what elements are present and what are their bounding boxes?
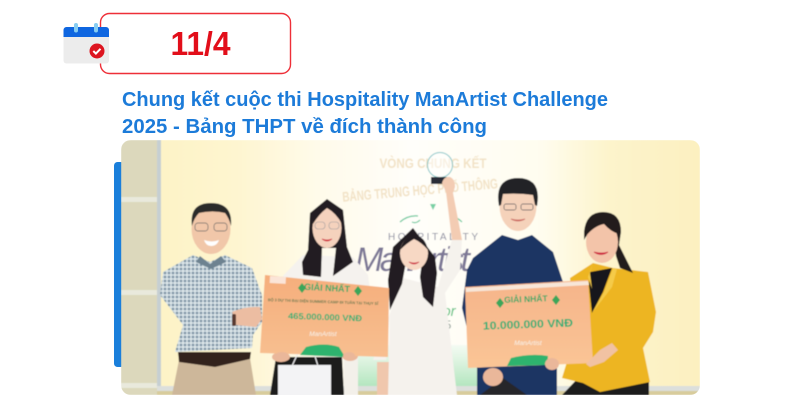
prize sign: 465.000.000 VNĐ: GIẢI NHẤT (304, 281, 351, 294)
prize sign: 465.000.000 VNĐ: 465.000.000 VNĐ (288, 311, 362, 323)
person: girl holding trophy (373, 177, 462, 395)
trophy (428, 152, 452, 184)
prize sign: 10.000.000 VNĐ: 10.000.000 VNĐ (483, 317, 573, 333)
icon: calendar (64, 23, 109, 64)
date box (100, 14, 290, 74)
backdrop lettering: or (442, 303, 457, 320)
prize sign: 10.000.000 VNĐ: ManArtist (514, 340, 543, 347)
prize sign: 10.000.000 VNĐ: GIẢI NHẤT (504, 292, 549, 305)
person: man in checked shirt (160, 203, 262, 395)
backdrop lettering: HOSPITALITY (388, 232, 478, 243)
title: 2025 - Bảng THPT về đích thành công (122, 116, 487, 138)
date text: 11/4 (170, 25, 231, 62)
photo background: stage backdrop (121, 140, 700, 395)
backdrop leaf mark (400, 204, 462, 223)
backdrop lettering (342, 154, 498, 332)
photo: award ceremony (121, 140, 700, 397)
person: girl in white ao dai (270, 199, 370, 397)
prize sign: 465.000.000 VNĐ (260, 275, 389, 360)
backdrop lettering: VÒNG CHUNG KẾT (380, 154, 487, 171)
prize sign: 10.000.000 VNĐ (465, 280, 618, 370)
title (122, 89, 608, 138)
backdrop lettering: ManArtist (355, 241, 472, 279)
backdrop lettering: 5 (445, 318, 452, 332)
prize sign: 465.000.000 VNĐ: BỘ 3 DỰ THI ĐẠI DIỆN SUMMER CAMP ĐI TUẦN TẠI THỤY SĨ (268, 297, 379, 306)
title: Chung kết cuộc thi Hospitality ManArtist Challenge (122, 89, 608, 111)
blue accent bar (114, 162, 124, 367)
prize sign: 465.000.000 VNĐ: ManArtist (309, 331, 338, 338)
backdrop lettering: BẢNG TRUNG HỌC PHỔ THÔNG (342, 174, 498, 205)
person: woman in yellow blazer (562, 212, 656, 395)
person: boy in navy ao dai (462, 178, 564, 395)
